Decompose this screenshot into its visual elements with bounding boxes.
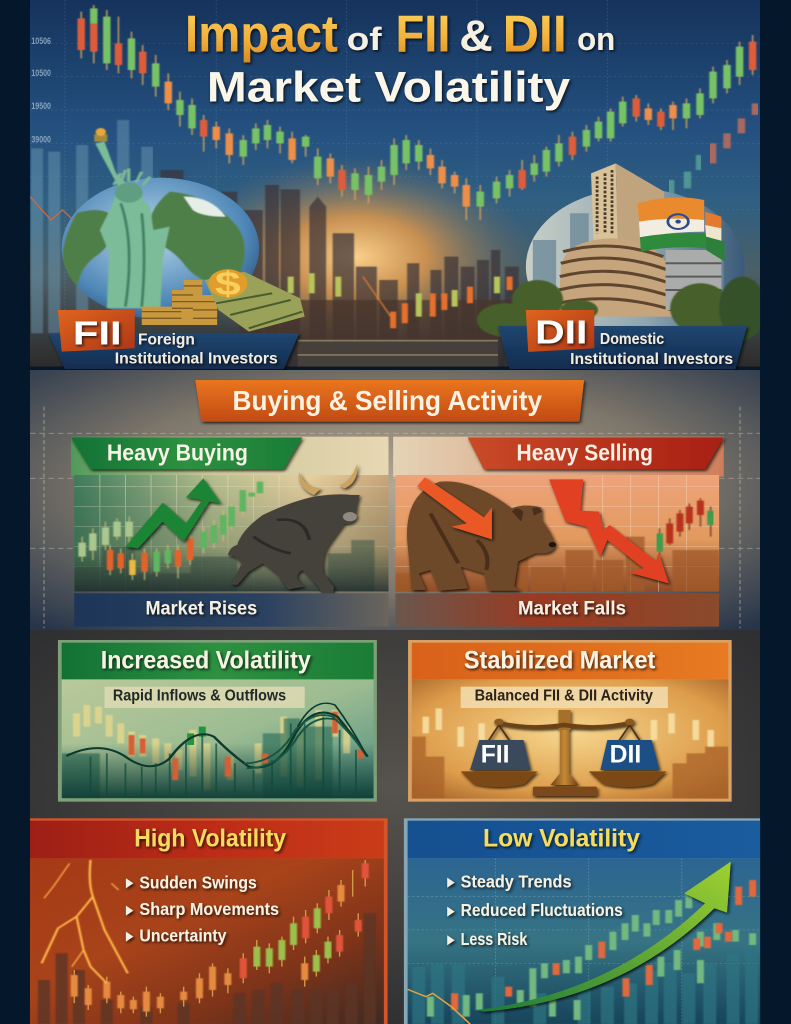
DII description: Domestic [600, 330, 664, 348]
card body [30, 858, 384, 1024]
orange candles [74, 885, 341, 1012]
card heading [412, 643, 728, 679]
panel: heavy buying [71, 437, 389, 627]
bullet: uncertainty [126, 927, 227, 946]
bullet: less risk [447, 930, 527, 949]
panel: hero market scene [30, 0, 766, 369]
dark teal background bars [419, 947, 752, 1024]
FII badge: FII [73, 314, 122, 352]
panel: middle section background [30, 370, 760, 632]
banner side rules [72, 386, 752, 414]
wave curve [66, 713, 368, 768]
panel: buying and selling activity [30, 380, 760, 628]
card frame [30, 818, 388, 1024]
DII weight: DII [610, 740, 641, 768]
dollar coin: $ [215, 265, 241, 302]
globe land masses [63, 192, 245, 297]
bullet: uncertainty: Uncertainty [139, 927, 227, 946]
orange decline line [408, 989, 470, 1024]
card: low volatility [404, 818, 760, 1024]
card frame [58, 640, 377, 802]
left background volume bars [37, 120, 147, 333]
card body [412, 679, 728, 799]
rotunda [558, 238, 673, 317]
top strip [71, 437, 389, 477]
card heading [408, 821, 760, 858]
Indian flag [638, 197, 725, 262]
bullet: steady trends: Steady Trends [461, 872, 571, 891]
axis labels [31, 37, 51, 145]
section heading banner [195, 380, 584, 422]
bottom caption: market falls: Market Falls [518, 597, 626, 618]
top strip [393, 437, 724, 477]
subheading chip: Rapid Inflows & Outflows [113, 687, 286, 704]
card: high volatility [30, 818, 388, 1024]
section heading banner: Buying & Selling Activity [233, 385, 542, 417]
trees [477, 277, 766, 340]
bullet: sharp movements [126, 900, 279, 919]
DII description [570, 330, 733, 368]
colored candles [132, 712, 361, 780]
Statue of Liberty [94, 128, 170, 308]
title: FII [395, 6, 450, 63]
chart area [74, 475, 389, 592]
green candles [257, 908, 328, 972]
orange down arrow over bear [417, 477, 492, 539]
dotted grid [408, 858, 760, 1024]
FII weight [470, 740, 531, 770]
lightning bolt [42, 860, 128, 983]
pale background candles [77, 705, 347, 790]
bull [228, 463, 360, 597]
scale beam [498, 721, 631, 729]
card: increased volatility [58, 640, 377, 802]
rising green arrow [477, 862, 731, 1012]
FII description: Foreign [138, 331, 195, 349]
bullet: reduced fluctuations [447, 901, 623, 920]
road bands [298, 340, 498, 367]
dollar coin [208, 269, 248, 298]
bullet: reduced fluctuations: Reduced Fluctuations [461, 901, 623, 920]
money pile: coins and cash [142, 265, 305, 332]
axis labels: 19500 [31, 102, 51, 111]
green rising arrow [125, 478, 221, 548]
bottom caption: market rises [74, 593, 389, 627]
secondary faded chart [671, 155, 700, 197]
bullet: steady trends [447, 872, 571, 891]
wicks [74, 860, 365, 1017]
red candles [455, 880, 753, 1010]
globe [62, 178, 259, 319]
sunset glow [236, 162, 516, 336]
FII label plate [49, 333, 299, 369]
distant skyline [160, 170, 519, 367]
scale pillar and base [551, 730, 578, 785]
market candlestick chart [81, 5, 753, 220]
chart area [395, 475, 719, 592]
panel: volatility cards [30, 640, 760, 1024]
FII description: Institutional Investors [115, 349, 278, 367]
FII weight: FII [481, 740, 510, 768]
left trend line [30, 196, 72, 221]
title: of [347, 22, 383, 57]
dark background bars [44, 913, 370, 1024]
title: Impact [185, 6, 338, 63]
panel: heavy selling [393, 437, 724, 627]
pale candles [426, 708, 711, 747]
title [185, 6, 615, 111]
lower city candles [291, 273, 510, 328]
card heading: Increased Volatility [101, 645, 311, 674]
title: Market Volatility [207, 63, 570, 111]
green candles [430, 893, 753, 1020]
ribbon: heavy selling: Heavy Selling [517, 440, 653, 466]
city silhouettes [412, 737, 728, 798]
foreground street-level bars [253, 300, 533, 340]
card frame [404, 818, 760, 1024]
BSE tower [591, 163, 618, 240]
card body [408, 858, 760, 1024]
axis labels: 39000 [31, 135, 51, 145]
card frame [408, 640, 732, 802]
DII dome backdrop with exchange building and flag [477, 163, 766, 347]
bottom caption: market rises: Market Rises [145, 597, 257, 618]
scale pans [461, 771, 538, 787]
section grid lines [30, 407, 760, 628]
axis labels: 10500 [31, 69, 51, 78]
FII badge [58, 310, 135, 352]
card heading: Low Volatility [483, 824, 640, 852]
bear [407, 481, 556, 591]
candles [82, 478, 260, 580]
subheading chip [104, 687, 305, 708]
ribbon: heavy buying: Heavy Buying [107, 440, 248, 466]
bottom caption: market falls [395, 593, 719, 627]
hero grid lines [30, 0, 760, 333]
side wing [666, 250, 721, 310]
ribbon: heavy buying [71, 437, 302, 469]
volume bars [62, 718, 333, 798]
title: on [577, 22, 615, 57]
title: & [459, 12, 493, 61]
title: DII [503, 6, 567, 63]
card heading: Stabilized Market [464, 645, 655, 674]
card body [62, 679, 374, 799]
red candles [243, 863, 365, 978]
bullet: sudden swings [126, 873, 257, 892]
candles [659, 498, 711, 555]
FII description [115, 331, 278, 367]
axis labels: 10506 [31, 37, 51, 46]
card heading: High Volatility [134, 824, 286, 852]
ribbon: heavy selling [468, 437, 724, 469]
bullet: less risk: Less Risk [461, 930, 527, 949]
card heading [30, 821, 384, 858]
panel: lower section background [30, 630, 760, 1024]
subheading chip: Balanced FII & DII Activity [475, 687, 653, 704]
balance scale [461, 710, 666, 796]
bullet: sharp movements: Sharp Movements [139, 900, 279, 919]
zigzag red falling arrow [549, 479, 669, 583]
card heading [62, 643, 374, 679]
DII badge: DII [535, 313, 587, 351]
DII label plate [498, 326, 747, 369]
hero sky background [30, 0, 760, 367]
card: stabilized market [408, 640, 732, 802]
subheading chip [461, 687, 668, 708]
bullet: sudden swings: Sudden Swings [139, 873, 257, 892]
